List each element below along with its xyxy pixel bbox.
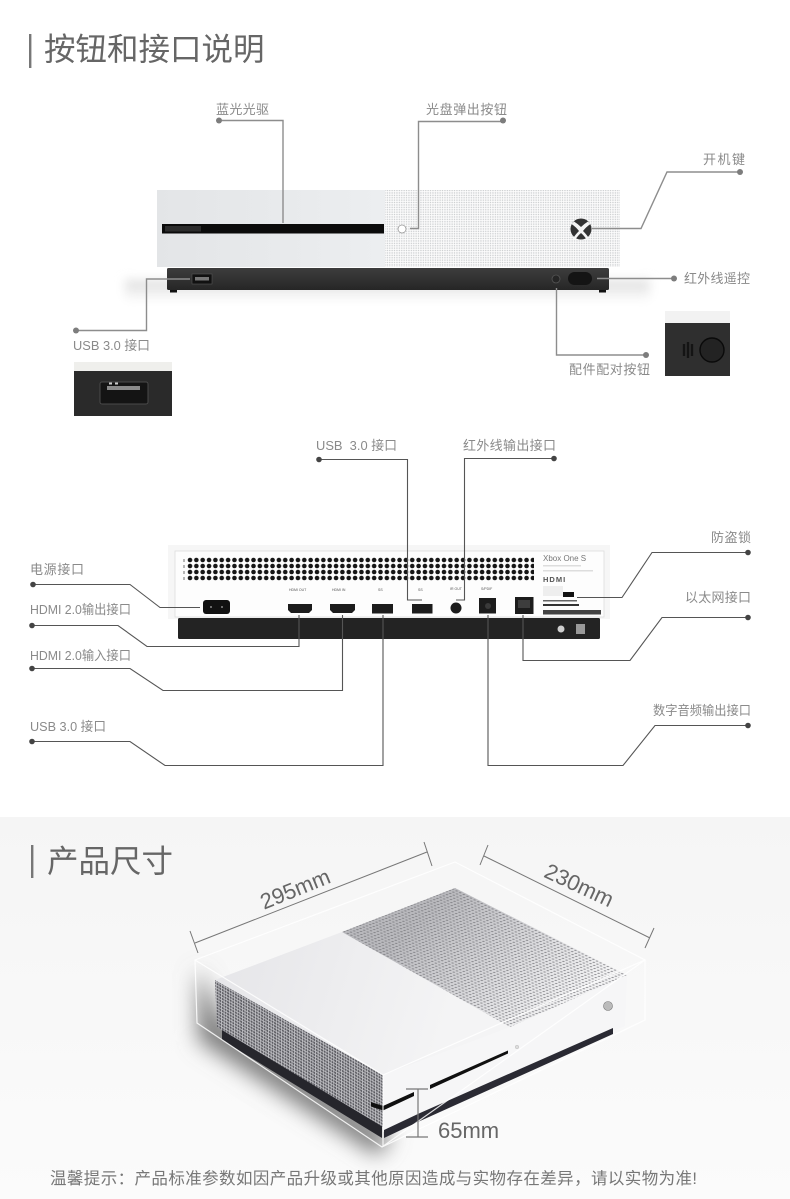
rear black base bar <box>178 618 600 639</box>
port: ir out: IR OUT <box>450 587 463 591</box>
front view shadow <box>125 280 650 302</box>
photo: pairing button close-up <box>665 311 730 376</box>
disc slot <box>162 224 384 234</box>
panel: console rear view <box>168 545 610 639</box>
label: digital audio output: 数字音频输出接口 <box>653 703 751 718</box>
label: blu-ray drive <box>216 102 283 223</box>
front usb port <box>192 274 212 284</box>
rear xbox logo and qr mark <box>558 624 585 634</box>
port: hdmi out <box>288 588 312 613</box>
port: hdmi in <box>330 588 355 613</box>
icon: xbox power button <box>570 218 592 240</box>
infrared window <box>568 272 592 285</box>
top solid face <box>215 932 510 1075</box>
port: usb 1 <box>372 588 393 614</box>
label: hdmi 2.0 input: HDMI 2.0输入接口 <box>30 648 131 663</box>
front dark base <box>384 1028 613 1138</box>
dimension: height 65mm: 65mm <box>438 1118 499 1143</box>
label: ethernet: 以太网接口 <box>685 590 751 605</box>
front black base bar <box>167 268 609 292</box>
section background <box>0 817 790 1199</box>
label: usb 3.0 rear left <box>29 615 383 766</box>
panel: console front view <box>125 190 650 302</box>
front left glossy panel <box>157 190 385 267</box>
label: infrared output <box>456 438 557 600</box>
port: s/pdif: S/PDIF <box>481 587 492 591</box>
label: security lock: 防盗锁 <box>711 530 751 545</box>
label: infrared remote: 红外线遥控 <box>684 271 750 286</box>
port: s/pdif <box>479 587 496 614</box>
label: front usb 3.0 <box>73 279 190 353</box>
port: ir out <box>450 587 463 614</box>
label: blu-ray drive: 蓝光光驱 <box>216 102 269 117</box>
front vented panel <box>385 190 620 267</box>
label: power key: 开机键 <box>703 152 745 167</box>
label: ethernet <box>523 590 751 660</box>
product label block: Xbox One S <box>543 554 586 563</box>
label: power port <box>30 562 200 608</box>
label: infrared remote <box>597 271 750 286</box>
label: disc eject button: 光盘弹出按钮 <box>426 102 507 117</box>
front disc slot right <box>430 1050 508 1089</box>
label: usb 3.0 rear top: USB 3.0 接口 <box>316 438 397 453</box>
dimension: width 295mm <box>190 842 432 953</box>
label: hdmi 2.0 output: HDMI 2.0输出接口 <box>30 602 131 617</box>
rear vent holes <box>187 557 534 581</box>
rear vent side marks <box>183 559 185 580</box>
heading: buttons and ports: 按钮和接口说明 <box>44 31 265 67</box>
label: power key <box>592 152 745 228</box>
label: accessory pairing button <box>556 288 650 377</box>
console eject button <box>515 1045 519 1049</box>
port: power <box>203 600 230 614</box>
console shadow <box>198 968 392 1156</box>
label: usb 3.0 rear top <box>316 438 422 600</box>
port: ethernet <box>515 597 534 614</box>
left vent face <box>215 980 383 1127</box>
product label block <box>543 554 601 614</box>
underside dark base left <box>222 1028 382 1138</box>
footer note: 温馨提示：产品标准参数如因产品升级或其他原因造成与实物存在差异，请以实物为准! <box>50 1169 697 1188</box>
front disc slot left <box>371 1092 414 1110</box>
port: hdmi in: HDMI IN <box>332 588 346 592</box>
dimension: width 295mm: 295mm <box>256 864 334 914</box>
label: security lock <box>577 530 751 598</box>
top vent base <box>342 888 627 1027</box>
label: accessory pairing button: 配件配对按钮 <box>569 362 650 377</box>
photo: usb port close-up <box>74 362 172 416</box>
panel: product dimensions <box>0 817 790 1199</box>
label: hdmi 2.0 output <box>29 602 299 646</box>
label: power port: 电源接口 <box>30 562 84 577</box>
label: front usb 3.0: USB 3.0 接口 <box>73 338 150 353</box>
top vent dots <box>342 888 627 1027</box>
label: usb 3.0 rear left: USB 3.0 接口 <box>30 719 106 734</box>
port: usb 2 <box>412 588 432 614</box>
console xbox logo <box>604 1002 612 1010</box>
label: disc eject button <box>410 102 507 228</box>
rear white body <box>168 545 610 619</box>
transparent bounding box <box>195 862 645 1147</box>
dimension: depth 230mm: 230mm <box>541 858 618 912</box>
product label block: HDMI <box>543 575 566 584</box>
label: digital audio output <box>488 615 751 766</box>
port: usb 1: SS <box>378 588 383 592</box>
port: usb 2: SS <box>418 588 423 592</box>
dimension: depth 230mm <box>480 845 654 948</box>
label: infrared output: 红外线输出接口 <box>463 438 556 453</box>
pairing button <box>552 275 560 283</box>
3d console <box>215 888 627 1138</box>
front white face <box>383 975 627 1132</box>
label: hdmi 2.0 input <box>29 615 342 690</box>
dimension: height 65mm <box>406 1089 499 1143</box>
eject button <box>398 225 406 233</box>
port: hdmi out: HDMI OUT <box>289 588 307 592</box>
heading: product size: 产品尺寸 <box>47 843 173 879</box>
